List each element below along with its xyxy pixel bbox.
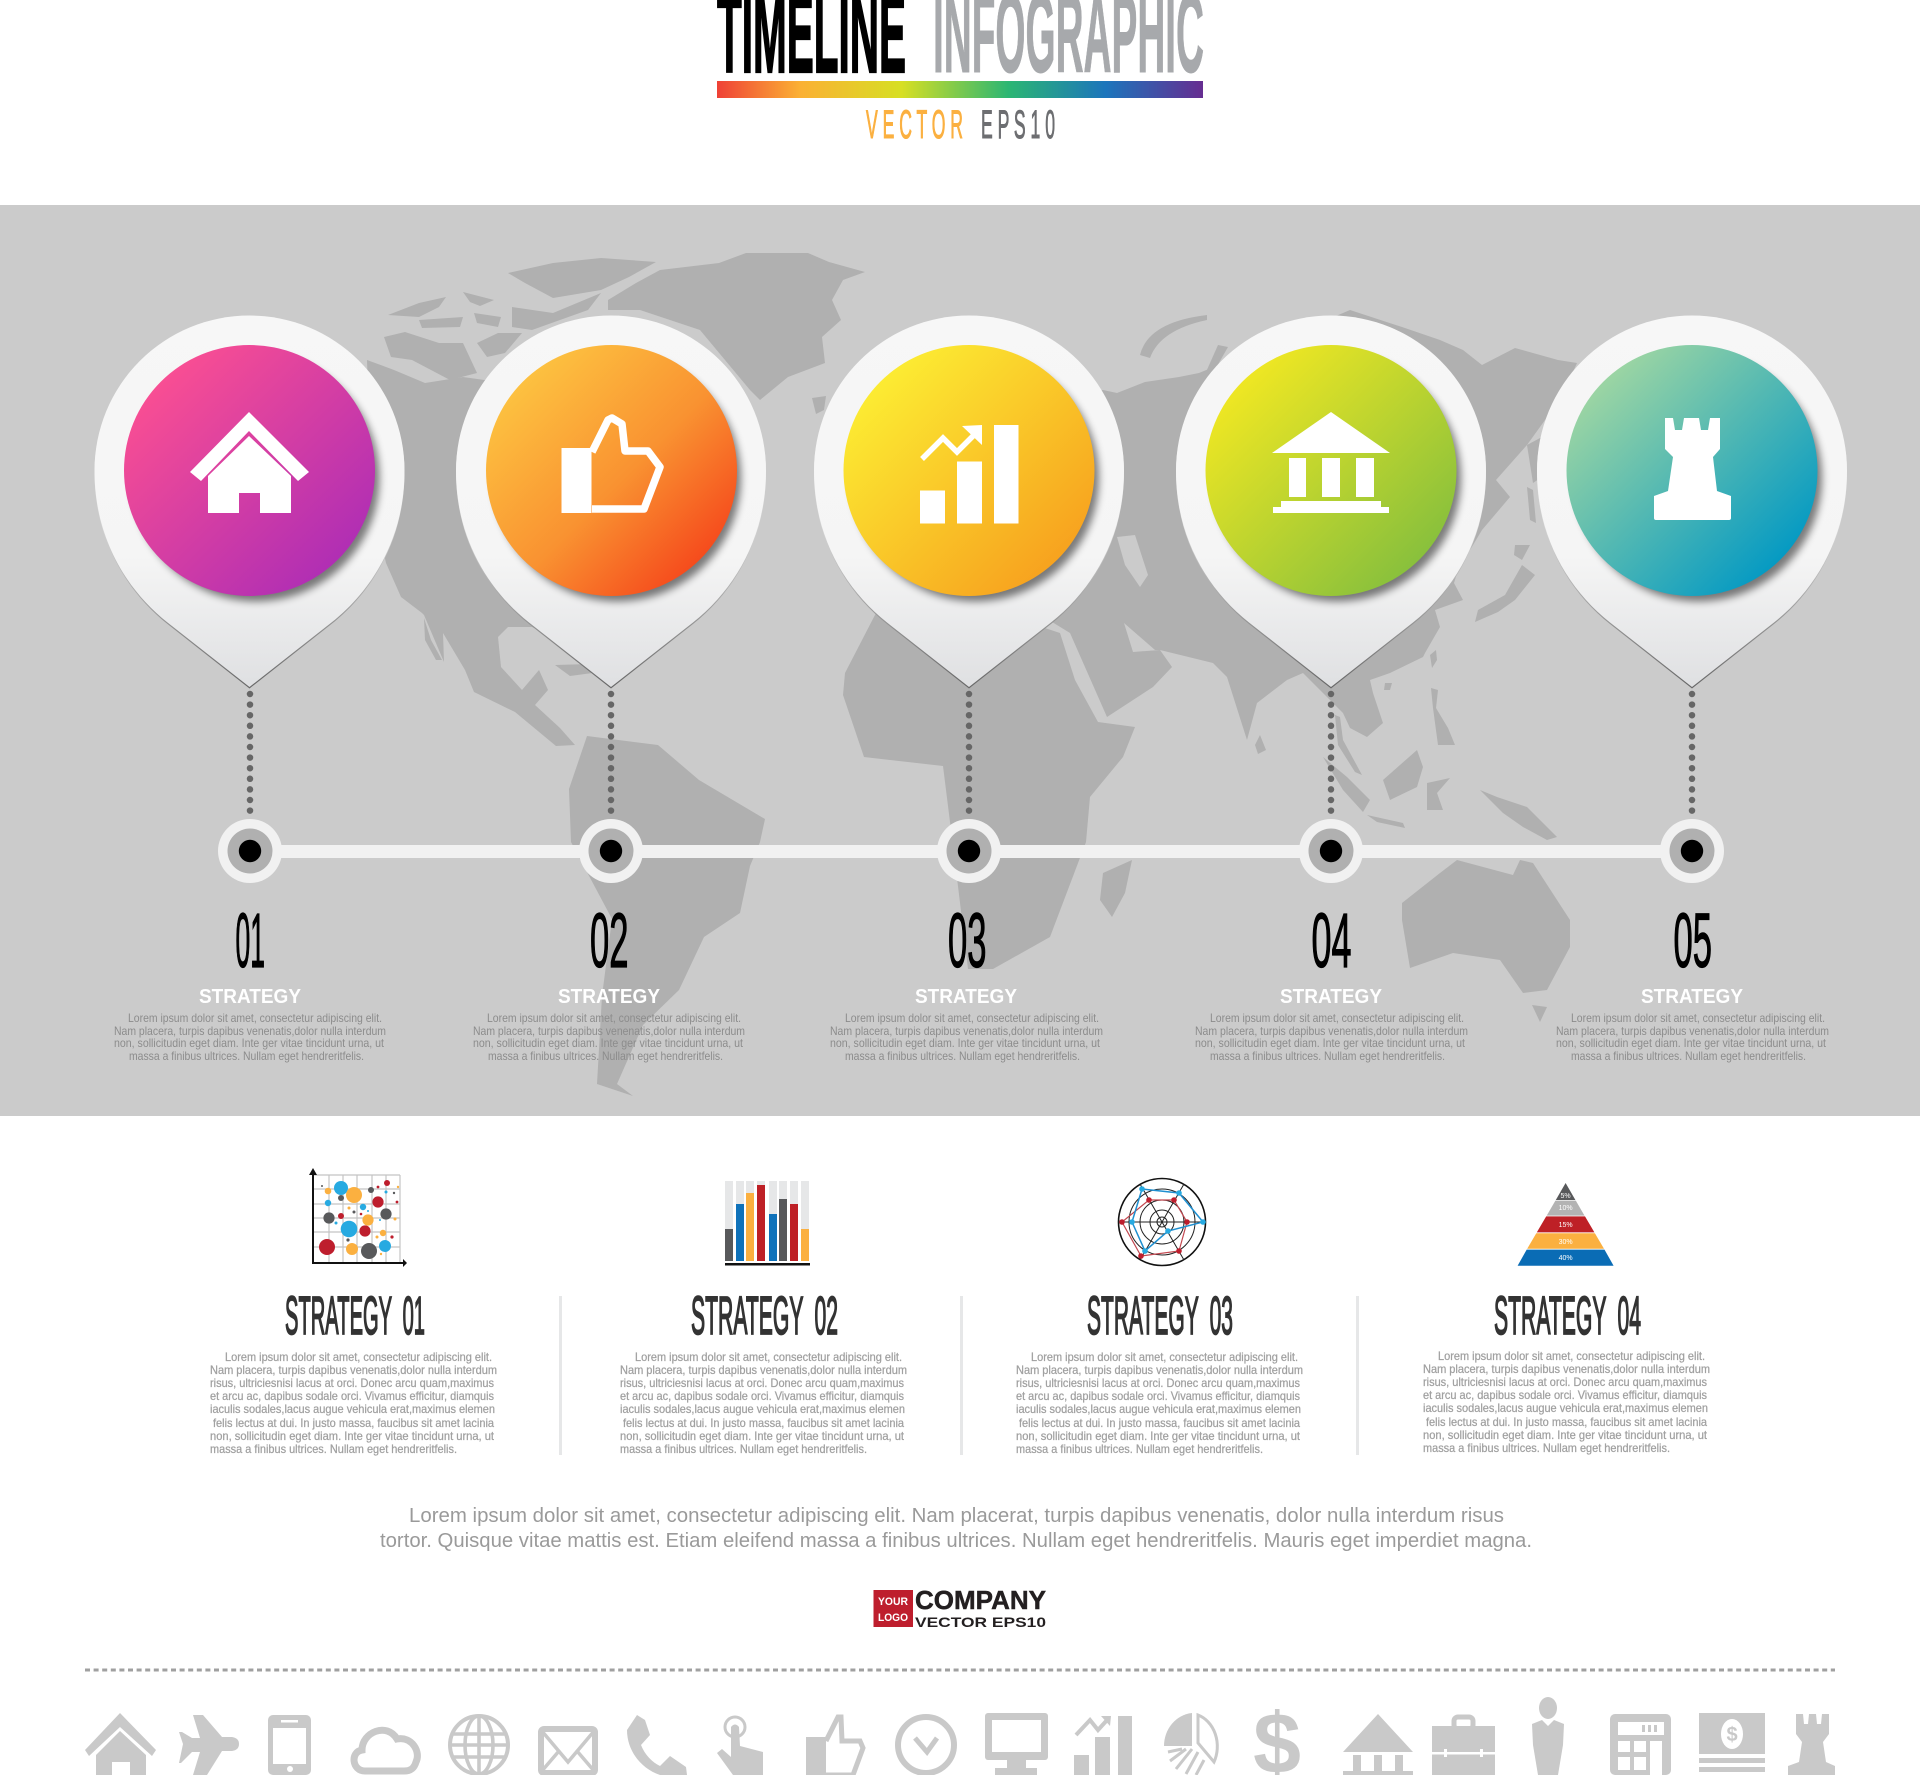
step 05 label: STRATEGY bbox=[1641, 986, 1744, 1008]
step 02 label: massa a finibus ultrices. Nullam eget hendreritfelis. bbox=[488, 1049, 723, 1063]
divider 1 bbox=[559, 1296, 562, 1455]
timeline node 02 bbox=[579, 819, 643, 883]
icon: house bbox=[190, 412, 309, 513]
icon: growth chart bbox=[920, 425, 1018, 524]
strategy column 03: felis lectus at dui. In justo massa, faucibus sit amet lacinia bbox=[1019, 1416, 1300, 1430]
strategy column 02: STRATEGY 02 bbox=[691, 1286, 838, 1346]
step 02 label: Lorem ipsum dolor sit amet, consectetur adipiscing elit. bbox=[487, 1011, 741, 1025]
icon row bbox=[85, 1696, 1835, 1775]
icon: person bbox=[1532, 1697, 1564, 1775]
strategy column 03: iaculis sodales,lacus augue vehicula erat,maximus elemen bbox=[1016, 1402, 1301, 1416]
step 04 label: Nam placera, turpis dapibus venenatis,dolor nulla interdum bbox=[1195, 1024, 1468, 1038]
summary paragraph bbox=[380, 1505, 1532, 1552]
step 05 label: 05 bbox=[1674, 898, 1712, 984]
dotted connector 02 bbox=[608, 694, 614, 812]
strategy column 03: Nam placera, turpis dapibus venenatis,dolor nulla interdum bbox=[1016, 1363, 1303, 1377]
step 01 label: Lorem ipsum dolor sit amet, consectetur adipiscing elit. bbox=[128, 1011, 382, 1025]
step 03 label: 03 bbox=[948, 898, 986, 984]
dotted connector 05 bbox=[1689, 694, 1695, 812]
company logo: LOGO bbox=[878, 1612, 908, 1624]
strategy column 01 bbox=[210, 1286, 497, 1456]
icon: growth chart small bbox=[1074, 1716, 1132, 1775]
chart icon: pyramid: 30% bbox=[1559, 1239, 1573, 1246]
icon: pie chart bbox=[1164, 1713, 1217, 1775]
icon: bank bbox=[1272, 412, 1390, 513]
strategy column 02: et arcu ac, dapibus sodale orci. Vivamus efficitur, diamquis bbox=[620, 1389, 904, 1403]
icon: mail bbox=[541, 1729, 595, 1773]
pin 03 bbox=[814, 316, 1124, 688]
timeline node 04 bbox=[1299, 819, 1363, 883]
strategy column 03: non, sollicitudin eget diam. Inte ger vitae tincidunt urna, ut bbox=[1016, 1429, 1301, 1443]
strategy column 02: Lorem ipsum dolor sit amet, consectetur adipiscing elit. bbox=[635, 1350, 902, 1364]
pin 01 bbox=[94, 316, 404, 688]
icon: telephone bbox=[627, 1715, 687, 1775]
divider 3 bbox=[1356, 1296, 1359, 1455]
strategy column 04: felis lectus at dui. In justo massa, faucibus sit amet lacinia bbox=[1426, 1415, 1707, 1429]
icon: globe bbox=[450, 1716, 508, 1774]
step 01 label: 01 bbox=[236, 898, 265, 984]
icon: banknote bbox=[1699, 1713, 1765, 1772]
step 04 label bbox=[1195, 898, 1468, 1063]
strategy column 01: iaculis sodales,lacus augue vehicula erat,maximus elemen bbox=[210, 1402, 495, 1416]
strategy column 04 bbox=[1423, 1286, 1710, 1455]
strategy column 01: Lorem ipsum dolor sit amet, consectetur adipiscing elit. bbox=[225, 1350, 492, 1364]
company logo: YOUR bbox=[878, 1596, 908, 1608]
step 04 label: 04 bbox=[1312, 898, 1352, 984]
strategy column 04: et arcu ac, dapibus sodale orci. Vivamus efficitur, diamquis bbox=[1423, 1388, 1707, 1402]
icon: banknote: $ bbox=[1726, 1724, 1738, 1746]
step 03 label bbox=[830, 898, 1103, 1063]
step 02 label: 02 bbox=[590, 898, 628, 984]
strategy column 04: STRATEGY 04 bbox=[1494, 1286, 1641, 1346]
icon: monitor bbox=[985, 1713, 1048, 1775]
step 04 label: Lorem ipsum dolor sit amet, consectetur adipiscing elit. bbox=[1210, 1011, 1464, 1025]
strategy column 01: Nam placera, turpis dapibus venenatis,dolor nulla interdum bbox=[210, 1363, 497, 1377]
step 02 label: non, sollicitudin eget diam. Inte ger vitae tincidunt urna, ut bbox=[473, 1036, 744, 1050]
timeline node 01 bbox=[218, 819, 282, 883]
strategy column 04: Nam placera, turpis dapibus venenatis,dolor nulla interdum bbox=[1423, 1362, 1710, 1376]
strategy column 01: non, sollicitudin eget diam. Inte ger vitae tincidunt urna, ut bbox=[210, 1429, 495, 1443]
icon: plane bbox=[179, 1715, 239, 1775]
company logo: COMPANY bbox=[915, 1585, 1046, 1615]
timeline line bbox=[250, 845, 1692, 858]
chart icon: bar chart bbox=[725, 1181, 810, 1266]
pin 04 bbox=[1176, 316, 1486, 688]
icon: bank small bbox=[1343, 1714, 1413, 1775]
summary paragraph: tortor. Quisque vitae mattis est. Etiam eleifend massa a finibus ultrices. Nullam eget hendreritfelis. Mauris eget imperdiet magna. bbox=[380, 1530, 1532, 1552]
text: E P S 1 0 bbox=[981, 103, 1055, 147]
dotted connector 01 bbox=[247, 694, 253, 812]
dotted connector 03 bbox=[966, 694, 972, 812]
pin 05 bbox=[1537, 316, 1847, 688]
strategy column 01: massa a finibus ultrices. Nullam eget hendreritfelis. bbox=[210, 1442, 457, 1456]
timeline node 05 bbox=[1660, 819, 1724, 883]
strategy column 03: risus, ultriciesnisi lacus at orci. Donec arcu quam,maximus bbox=[1016, 1376, 1300, 1390]
chart icon: bubble scatter bbox=[309, 1168, 407, 1267]
divider 2 bbox=[960, 1296, 963, 1455]
step 03 label: Lorem ipsum dolor sit amet, consectetur adipiscing elit. bbox=[845, 1011, 1099, 1025]
strategy column 04: massa a finibus ultrices. Nullam eget hendreritfelis. bbox=[1423, 1441, 1670, 1455]
pin 02 bbox=[456, 316, 766, 688]
strategy column 04: non, sollicitudin eget diam. Inte ger vitae tincidunt urna, ut bbox=[1423, 1428, 1708, 1442]
step 03 label: non, sollicitudin eget diam. Inte ger vitae tincidunt urna, ut bbox=[830, 1036, 1101, 1050]
step 05 label: massa a finibus ultrices. Nullam eget hendreritfelis. bbox=[1571, 1049, 1806, 1063]
strategy column 03: STRATEGY 03 bbox=[1087, 1286, 1233, 1346]
strategy column 02: non, sollicitudin eget diam. Inte ger vitae tincidunt urna, ut bbox=[620, 1429, 905, 1443]
icon: briefcase bbox=[1432, 1717, 1495, 1775]
world map bbox=[367, 253, 1577, 1096]
step 02 label: STRATEGY bbox=[558, 986, 661, 1008]
summary paragraph: Lorem ipsum dolor sit amet, consectetur adipiscing elit. Nam placerat, turpis dapibus venenatis, dolor nulla interdum risus bbox=[409, 1505, 1504, 1527]
chart icon: pyramid: 40% bbox=[1559, 1255, 1573, 1262]
icon: touch hand bbox=[717, 1717, 763, 1775]
strategy column 01: et arcu ac, dapibus sodale orci. Vivamus efficitur, diamquis bbox=[210, 1389, 494, 1403]
strategy column 03: et arcu ac, dapibus sodale orci. Vivamus efficitur, diamquis bbox=[1016, 1389, 1300, 1403]
step 01 label: STRATEGY bbox=[199, 986, 302, 1008]
strategy column 03: Lorem ipsum dolor sit amet, consectetur adipiscing elit. bbox=[1031, 1350, 1298, 1364]
step 01 label: non, sollicitudin eget diam. Inte ger vitae tincidunt urna, ut bbox=[114, 1036, 385, 1050]
step 04 label: non, sollicitudin eget diam. Inte ger vitae tincidunt urna, ut bbox=[1195, 1036, 1466, 1050]
strategy column 02: felis lectus at dui. In justo massa, faucibus sit amet lacinia bbox=[623, 1416, 904, 1430]
step 04 label: STRATEGY bbox=[1280, 986, 1383, 1008]
step 02 label bbox=[473, 898, 745, 1063]
step 03 label: Nam placera, turpis dapibus venenatis,dolor nulla interdum bbox=[830, 1024, 1103, 1038]
icon: clock bbox=[898, 1717, 954, 1773]
step 02 label: Nam placera, turpis dapibus venenatis,dolor nulla interdum bbox=[473, 1024, 745, 1038]
chart icon: radar bbox=[1118, 1178, 1206, 1266]
step 01 label: Nam placera, turpis dapibus venenatis,dolor nulla interdum bbox=[114, 1024, 386, 1038]
icon: thumbs up outline bbox=[806, 1717, 863, 1775]
chart icon: pyramid: 15% bbox=[1559, 1222, 1573, 1229]
icon: calculator bbox=[1610, 1714, 1671, 1775]
rainbow bar bbox=[717, 81, 1203, 98]
strategy column 02 bbox=[620, 1286, 907, 1456]
company logo: VECTOR EPS10 bbox=[915, 1614, 1046, 1630]
step 03 label: STRATEGY bbox=[915, 986, 1018, 1008]
strategy column 02: Nam placera, turpis dapibus venenatis,dolor nulla interdum bbox=[620, 1363, 907, 1377]
strategy column 02: risus, ultriciesnisi lacus at orci. Donec arcu quam,maximus bbox=[620, 1376, 904, 1390]
step 01 label: massa a finibus ultrices. Nullam eget hendreritfelis. bbox=[129, 1049, 364, 1063]
step 04 label: massa a finibus ultrices. Nullam eget hendreritfelis. bbox=[1210, 1049, 1445, 1063]
strategy column 02: iaculis sodales,lacus augue vehicula erat,maximus elemen bbox=[620, 1402, 905, 1416]
strategy column 03 bbox=[1016, 1286, 1303, 1456]
icon: thumbs up bbox=[562, 418, 660, 513]
step 01 label bbox=[114, 898, 386, 1063]
strategy column 04: iaculis sodales,lacus augue vehicula erat,maximus elemen bbox=[1423, 1401, 1708, 1415]
step 03 label: massa a finibus ultrices. Nullam eget hendreritfelis. bbox=[845, 1049, 1080, 1063]
step 05 label: non, sollicitudin eget diam. Inte ger vitae tincidunt urna, ut bbox=[1556, 1036, 1827, 1050]
strategy column 04: Lorem ipsum dolor sit amet, consectetur adipiscing elit. bbox=[1438, 1349, 1705, 1363]
step 05 label bbox=[1556, 898, 1829, 1063]
dotted connector 04 bbox=[1328, 694, 1334, 812]
strategy column 03: massa a finibus ultrices. Nullam eget hendreritfelis. bbox=[1016, 1442, 1263, 1456]
subtitle: V E C T O R bbox=[866, 103, 963, 147]
timeline node 03 bbox=[937, 819, 1001, 883]
strategy column 01: felis lectus at dui. In justo massa, faucibus sit amet lacinia bbox=[213, 1416, 494, 1430]
chart icon: pyramid: 5% bbox=[1561, 1193, 1571, 1200]
icon: rook bbox=[1654, 418, 1731, 520]
icon: rook small bbox=[1788, 1714, 1835, 1775]
icon: cloud bbox=[354, 1730, 417, 1771]
panel: map timeline band bbox=[0, 205, 1920, 1116]
icon: smartphone bbox=[268, 1715, 311, 1775]
chart icon: pyramid bbox=[1518, 1183, 1614, 1266]
company logo bbox=[874, 1585, 1046, 1630]
strategy column 01: risus, ultriciesnisi lacus at orci. Donec arcu quam,maximus bbox=[210, 1376, 494, 1390]
strategy column 04: risus, ultriciesnisi lacus at orci. Donec arcu quam,maximus bbox=[1423, 1375, 1707, 1389]
icon: home bbox=[85, 1713, 156, 1775]
chart icon: pyramid: 10% bbox=[1559, 1205, 1573, 1212]
strategy column 01: STRATEGY 01 bbox=[285, 1286, 425, 1346]
step 05 label: Nam placera, turpis dapibus venenatis,dolor nulla interdum bbox=[1556, 1024, 1829, 1038]
step 05 label: Lorem ipsum dolor sit amet, consectetur adipiscing elit. bbox=[1571, 1011, 1825, 1025]
strategy column 02: massa a finibus ultrices. Nullam eget hendreritfelis. bbox=[620, 1442, 867, 1456]
